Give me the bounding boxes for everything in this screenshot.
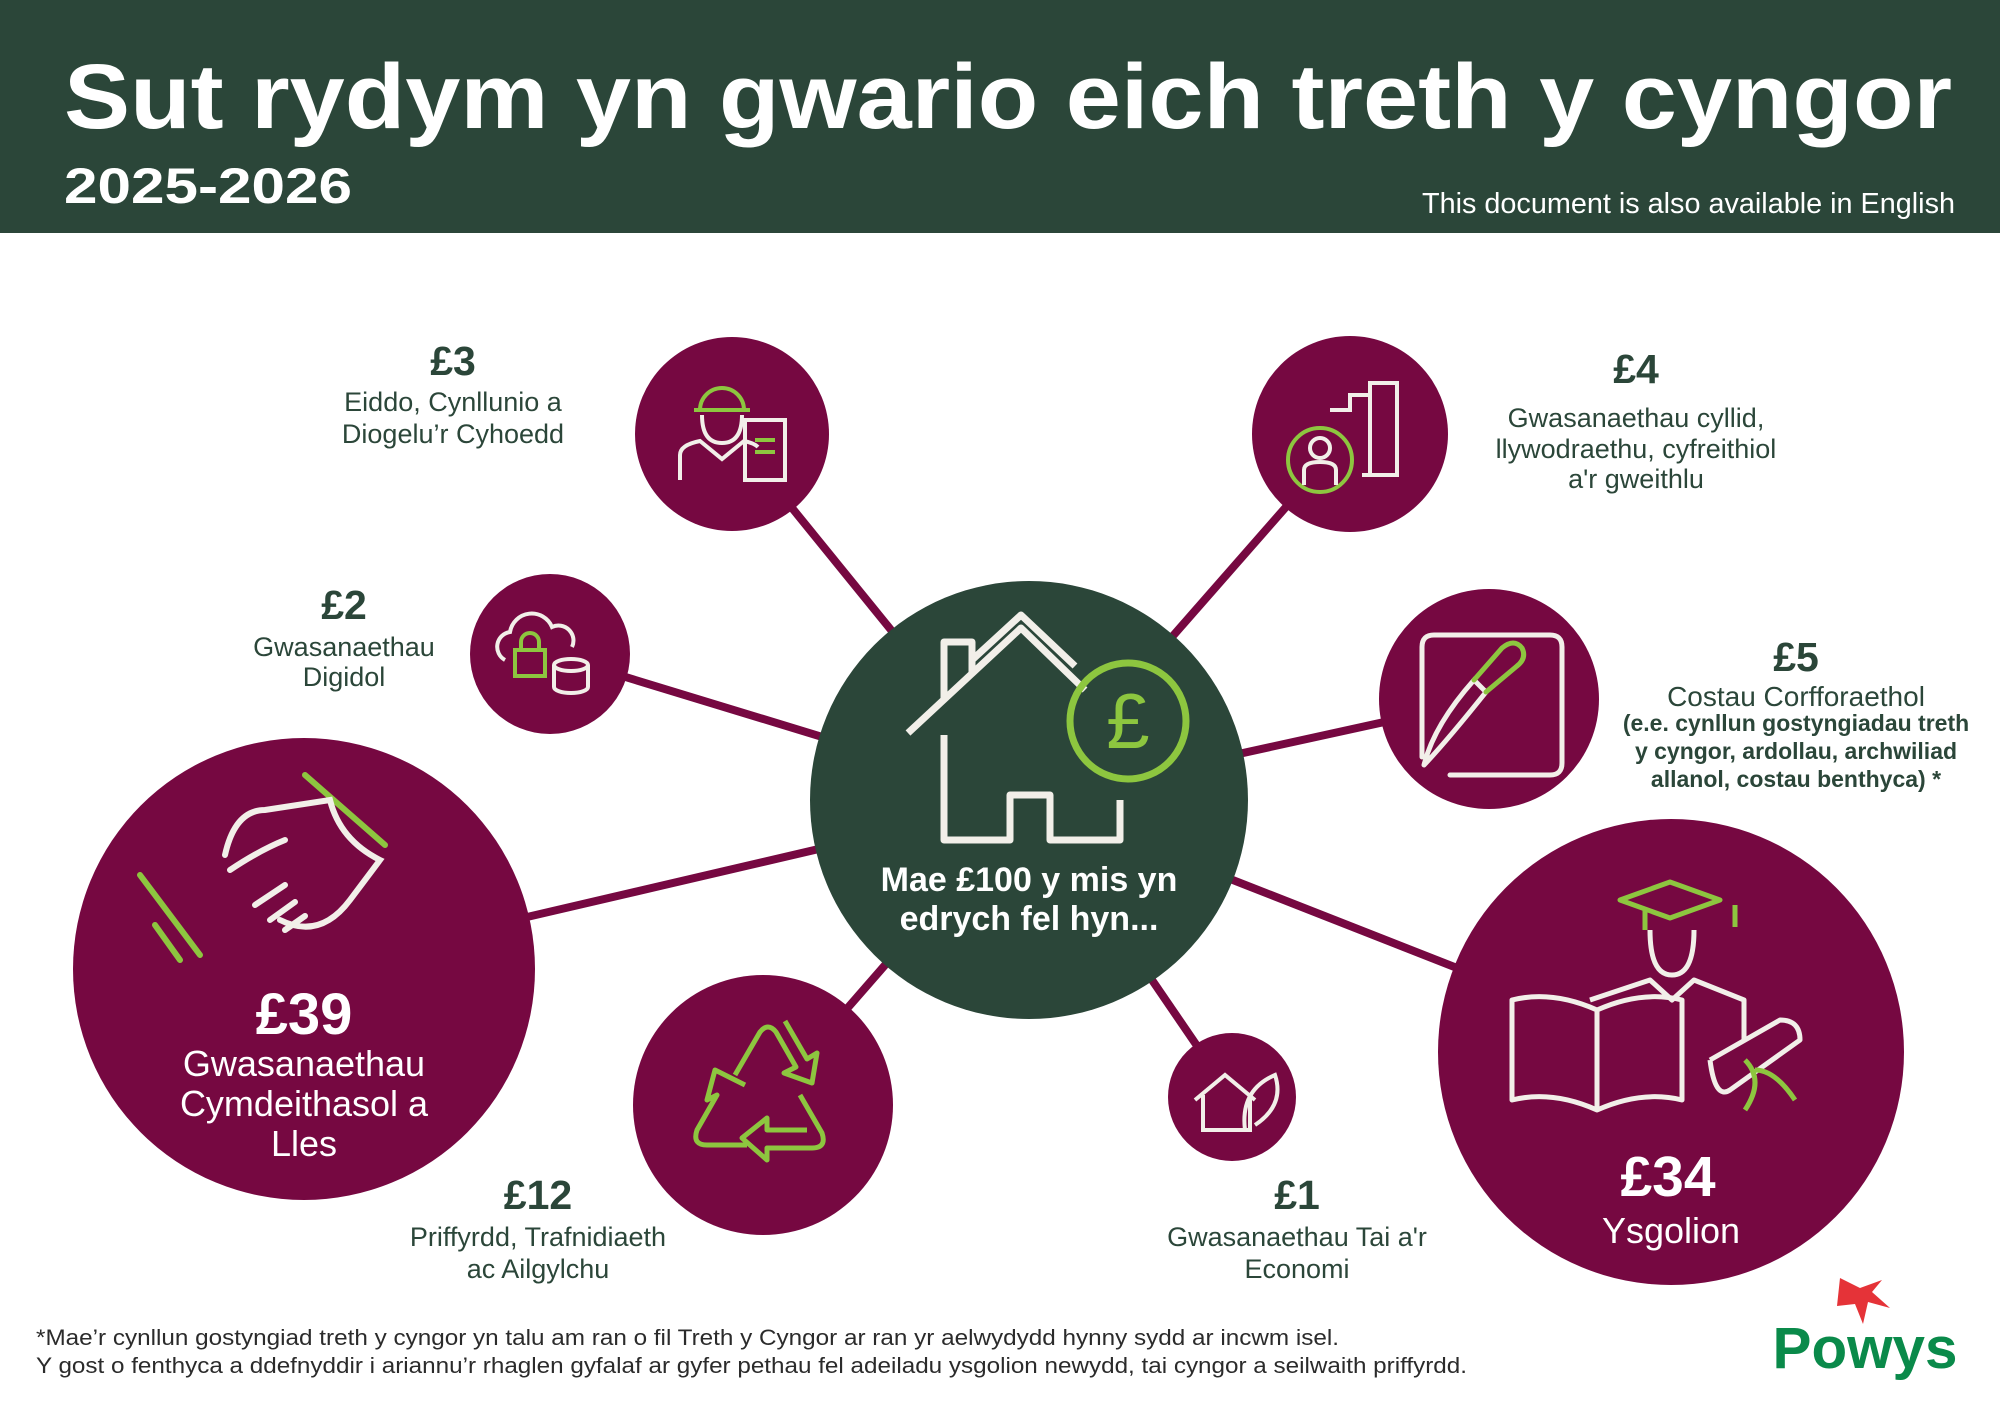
panel: £34 schools: £34	[1620, 1145, 1716, 1209]
connector lines	[304, 434, 1671, 1105]
panel: £3 property: £3	[430, 338, 476, 384]
panel: £12 roads recycling: Priffyrdd, Trafnidiaeth	[410, 1222, 666, 1252]
panel: £34 schools	[1438, 819, 1904, 1285]
panel: £12 roads recycling	[410, 975, 893, 1284]
footnote: *Mae’r cynllun gostyngiad treth y cyngor yn talu am ran o fil Treth y Cyngor ar ran yr aelwydydd hynny sydd ar incwm isel.	[36, 1325, 1339, 1350]
panel: £1 housing: £1	[1274, 1172, 1320, 1218]
center circle	[810, 581, 1248, 1019]
panel: £3 property: Diogelu’r Cyhoedd	[342, 419, 564, 449]
logo: Powys: Powys	[1772, 1316, 1958, 1381]
panel: £2 digital: £2	[321, 582, 367, 628]
icon: house with pound: £	[1106, 677, 1150, 765]
icon: handshake	[140, 775, 385, 960]
panel: £39 social services: Cymdeithasol a	[180, 1083, 429, 1124]
panel: £34 schools: Ysgolion	[1602, 1210, 1740, 1251]
footnote: Y gost o fenthyca a ddefnyddir i ariannu’r rhaglen gyfalaf ar gyfer pethau fel adeiladu ysgolion newydd, tai cyngor a seilwaith priffyrdd.	[36, 1353, 1467, 1378]
panel: £1 housing: Economi	[1244, 1254, 1350, 1284]
panel: £1 housing: Gwasanaethau Tai a'r	[1167, 1222, 1427, 1252]
subtitle year: 2025-2026	[64, 158, 352, 214]
panel: £4 finance: llywodraethu, cyfreithiol	[1496, 434, 1776, 464]
panel: £1 housing	[1167, 1033, 1427, 1284]
panel: £4 finance: £4	[1613, 346, 1659, 392]
panel: £5 corporate: £5	[1773, 634, 1819, 680]
icon: recycle	[696, 1021, 823, 1160]
panel: £5 corporate: allanol, costau benthyca) *	[1651, 766, 1941, 792]
icon: house with pound	[908, 615, 1186, 840]
panel: £3 property	[342, 337, 829, 531]
icon: house and leaf	[1195, 1075, 1278, 1130]
panel: £39 social services: Gwasanaethau	[183, 1043, 425, 1084]
icon: graduate with book	[1512, 882, 1800, 1110]
icon: pen in frame	[1422, 635, 1562, 775]
footnote	[36, 1325, 1467, 1378]
panel: £4 finance: a'r gweithlu	[1568, 464, 1704, 494]
panel: £4 finance	[1252, 336, 1776, 532]
center caption: Mae £100 y mis yn	[881, 861, 1177, 899]
panel: £3 property: Eiddo, Cynllunio a	[344, 387, 563, 417]
center circle: edrych fel hyn...	[900, 900, 1158, 938]
title: Sut rydym yn gwario eich treth y cyngor	[64, 46, 1952, 148]
icon: worker	[680, 388, 785, 480]
header band	[0, 0, 2000, 233]
panel: £2 digital	[253, 574, 630, 734]
english availability note: This document is also available in English	[1422, 188, 1955, 220]
panel: £5 corporate: y cyngor, ardollau, archwiliad	[1635, 738, 1957, 764]
panel: £39 social services	[73, 738, 535, 1200]
panel: £39 social services: Lles	[271, 1123, 337, 1164]
panel: £5 corporate	[1379, 589, 1969, 809]
panel: £4 finance: Gwasanaethau cyllid,	[1508, 403, 1764, 433]
panel: £12 roads recycling: £12	[504, 1172, 572, 1218]
icon: bars and person	[1288, 383, 1397, 492]
icon: cloud lock coins	[497, 614, 588, 693]
panel: £39 social services: £39	[256, 982, 352, 1047]
panel: £5 corporate: Costau Corfforaethol	[1667, 681, 1925, 712]
panel: £2 digital: Gwasanaethau	[253, 632, 435, 662]
logo: Powys	[1772, 1278, 1958, 1381]
panel: £12 roads recycling: ac Ailgylchu	[467, 1254, 609, 1284]
panel: £5 corporate: (e.e. cynllun gostyngiadau treth	[1623, 710, 1969, 736]
panel: £2 digital: Digidol	[303, 662, 385, 692]
